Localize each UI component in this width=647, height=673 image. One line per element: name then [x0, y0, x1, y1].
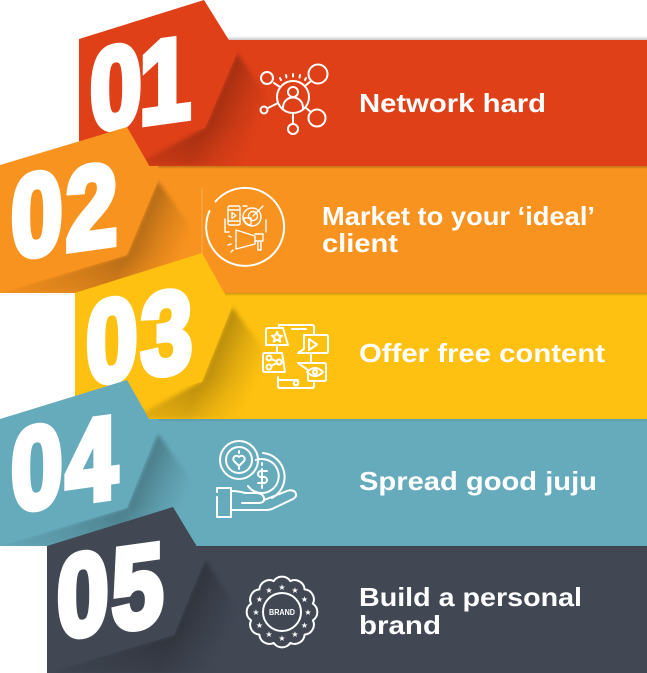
icon: brand badge: ★	[256, 621, 263, 630]
icon: brand badge: ★	[265, 586, 273, 595]
icon: brand badge: BRAND	[269, 607, 295, 617]
icon: brand badge: ★	[291, 630, 299, 639]
number tag 01: 01	[90, 14, 188, 156]
label: market to your ideal client: Market to your ‘ideal’	[322, 201, 595, 231]
icon: brand badge: ★	[304, 608, 312, 617]
number tag 03	[76, 253, 260, 419]
panel: step 01 network hard	[79, 0, 647, 166]
label: market to your ideal client	[322, 201, 595, 258]
number tag 05: 05	[57, 520, 167, 663]
number tag 03: 03	[86, 266, 196, 409]
icon: target marketing megaphone	[202, 188, 284, 272]
panel: step 02 market to your ideal client	[0, 127, 647, 293]
number tag 01	[79, 0, 262, 166]
label: build a personal brand	[359, 582, 582, 640]
icon: brand badge: ★	[278, 583, 286, 592]
label: offer free content: Offer free content	[359, 338, 605, 368]
panel: step 03 offer free content	[75, 253, 647, 419]
panel: step 05 build a personal brand	[47, 507, 647, 673]
label: network hard: Network hard	[359, 88, 546, 118]
icon: brand badge: ★	[291, 586, 299, 595]
icon: brand badge: ★	[252, 608, 260, 617]
icon: network person	[260, 64, 328, 134]
label: market to your ideal client: client	[322, 228, 398, 258]
number tag 04: 04	[11, 393, 121, 536]
label: build a personal brand: brand	[359, 610, 441, 640]
icon: brand badge: ★	[301, 621, 308, 630]
label: spread good juju: Spread good juju	[359, 466, 597, 496]
number tag 04	[0, 380, 184, 546]
icon: brand badge	[247, 577, 317, 647]
icon: brand badge: ★	[256, 595, 263, 604]
icon: brand badge: ★	[265, 630, 273, 639]
icon: brand badge: ★	[301, 595, 308, 604]
label: build a personal brand: Build a personal	[359, 582, 582, 612]
number tag 05	[47, 507, 222, 672]
number tag 02	[0, 127, 185, 294]
panel: step 04 spread good juju	[0, 380, 647, 546]
number tag 02: 02	[11, 140, 121, 283]
icon: content bubbles	[263, 325, 328, 388]
icon: brand badge: ★	[278, 634, 286, 643]
icon: coins over hand	[217, 441, 296, 517]
